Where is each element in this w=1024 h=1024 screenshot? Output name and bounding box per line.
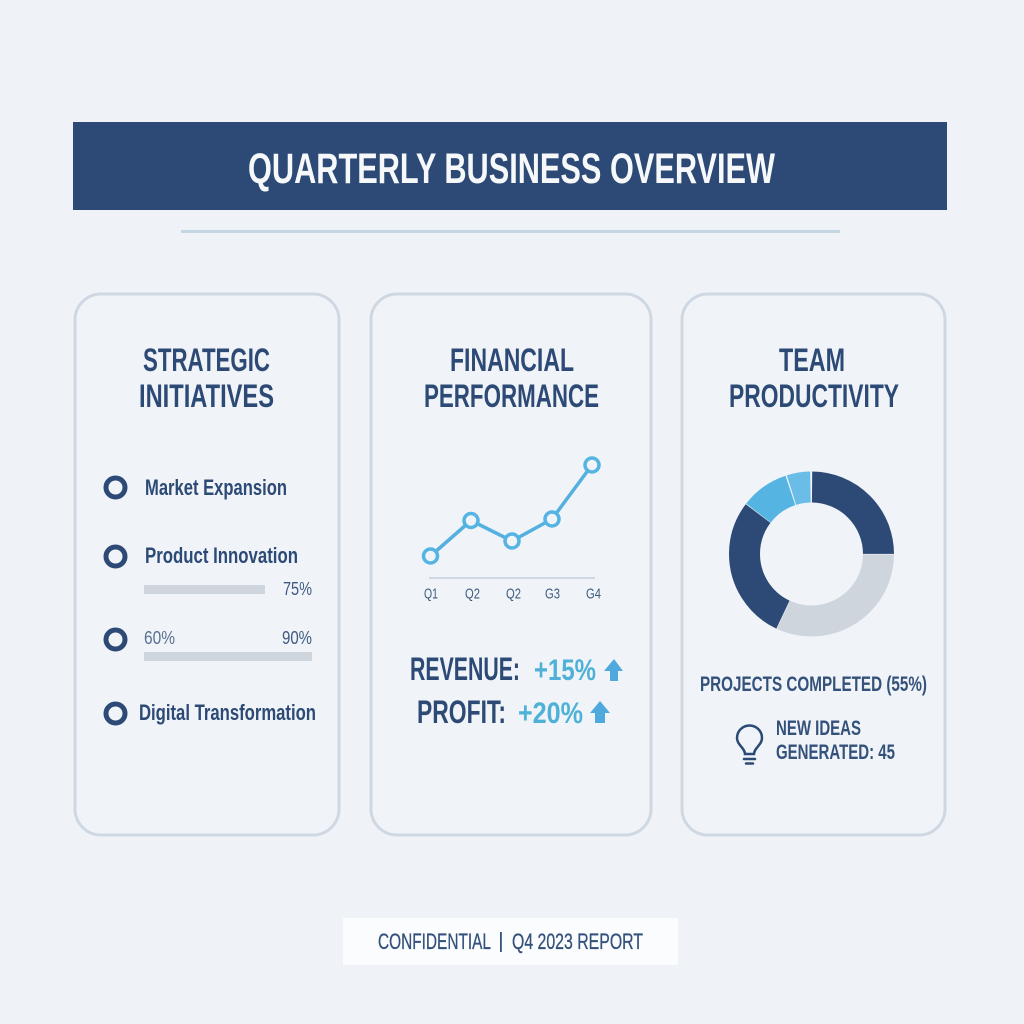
footer label: [343, 918, 678, 965]
item: digital transformation: [106, 700, 316, 725]
title banner: [73, 122, 947, 210]
line chart: [424, 458, 601, 602]
item: progress 60 to 90 percent: 90%: [282, 627, 312, 648]
icon: up arrow: [590, 701, 610, 723]
item: market expansion: Market Expansion: [145, 475, 287, 500]
label: projects completed: PROJECTS COMPLETED (55%): [700, 673, 927, 696]
panel: financial performance: [371, 294, 651, 835]
stat: new ideas generated: NEW IDEAS: [776, 717, 861, 740]
heading: strategic initiatives: STRATEGIC: [143, 342, 270, 378]
stat: profit: [417, 694, 610, 730]
stat: revenue: REVENUE:: [410, 651, 520, 687]
item: market expansion: [106, 475, 287, 500]
stat: new ideas generated: [776, 717, 895, 764]
footer label: CONFIDENTIAL: [378, 929, 491, 954]
item: product innovation: 75%: [283, 578, 312, 599]
heading: financial performance: [424, 342, 599, 414]
item: digital transformation: Digital Transformation: [139, 700, 316, 725]
stat: profit: PROFIT:: [417, 694, 506, 730]
panel: strategic initiatives: [75, 294, 339, 835]
title: QUARTERLY BUSINESS OVERVIEW: [248, 145, 775, 193]
stat: revenue: +15%: [534, 654, 596, 687]
line chart: Q1: [424, 586, 438, 602]
item: progress 60 to 90 percent: [106, 627, 312, 661]
heading: team productivity: TEAM: [779, 342, 845, 378]
line chart: Q2: [506, 586, 521, 602]
item: product innovation: Product Innovation: [145, 543, 298, 568]
line chart: Q2: [465, 586, 480, 602]
heading: financial performance: PERFORMANCE: [424, 378, 599, 414]
stat: profit: +20%: [518, 697, 583, 730]
heading: team productivity: [729, 342, 899, 414]
heading: strategic initiatives: [139, 342, 274, 414]
donut chart: [744, 487, 878, 621]
heading: team productivity: PRODUCTIVITY: [729, 378, 899, 414]
line chart: G4: [586, 586, 601, 602]
heading: financial performance: FINANCIAL: [450, 342, 574, 378]
line chart: G3: [545, 586, 560, 602]
panel: team productivity: [682, 294, 945, 835]
stat: new ideas generated: GENERATED: 45: [776, 741, 895, 764]
heading: strategic initiatives: INITIATIVES: [139, 378, 274, 414]
footer label: Q4 2023 REPORT: [512, 929, 643, 954]
icon: light bulb: [737, 725, 762, 764]
item: progress 60 to 90 percent: 60%: [144, 627, 175, 648]
icon: up arrow: [604, 659, 623, 681]
item: product innovation: [106, 543, 312, 599]
